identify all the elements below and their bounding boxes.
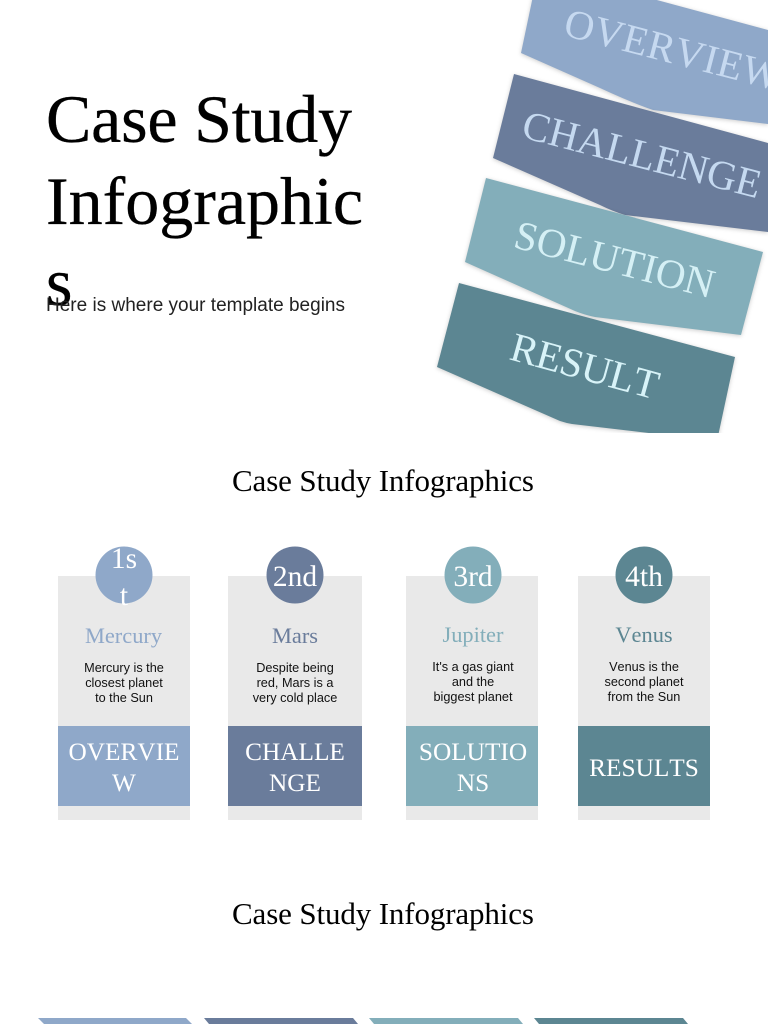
heading: section two: Case Study Infographics xyxy=(232,896,534,931)
card: Mercury: OVERVIE xyxy=(68,738,180,766)
title: Infographic xyxy=(46,163,363,239)
ribbon: result: RESULT xyxy=(506,323,664,408)
card: Jupiter: SOLUTIO xyxy=(419,738,527,766)
card: Mercury xyxy=(58,543,190,820)
card: Jupiter xyxy=(406,546,538,820)
card: Jupiter: Jupiter xyxy=(443,622,504,647)
card: Venus xyxy=(578,546,710,820)
card: Mars: very cold place xyxy=(253,691,337,705)
card: Mars: CHALLE xyxy=(245,738,345,766)
card: Jupiter: NS xyxy=(457,769,489,797)
card: Mars: 2nd xyxy=(273,561,317,593)
heading: section one: Case Study Infographics xyxy=(232,463,534,498)
card: Mercury: to the Sun xyxy=(95,691,153,705)
ribbon: solution: SOLUTION xyxy=(510,211,720,307)
card: Venus: from the Sun xyxy=(608,690,680,704)
title: Case Study xyxy=(46,81,352,157)
card: Venus: Venus is the xyxy=(609,660,679,674)
card: Mercury: Mercury is the xyxy=(84,661,164,675)
title xyxy=(46,81,363,320)
card: Mercury: W xyxy=(112,769,136,797)
card: Jupiter: 3rd xyxy=(453,561,493,593)
card: Mercury: 1s xyxy=(111,543,137,575)
card: Mars: Mars xyxy=(272,623,318,648)
title: s xyxy=(46,244,72,320)
bottom chevrons xyxy=(38,1018,688,1024)
ribbon stack xyxy=(437,0,768,441)
card: Venus: 4th xyxy=(625,561,663,593)
card: Mars: NGE xyxy=(269,769,321,797)
card: Venus: RESULTS xyxy=(589,754,699,782)
card: Mercury: closest planet xyxy=(85,676,163,690)
card: Mars xyxy=(228,546,362,820)
card: Venus: Venus xyxy=(615,622,673,647)
card: Mercury: Mercury xyxy=(85,623,163,648)
ribbon: solution xyxy=(465,178,763,335)
subtitle: Here is where your template begins xyxy=(46,295,345,316)
card: Venus: second planet xyxy=(604,675,684,689)
card: Jupiter: biggest planet xyxy=(433,690,513,704)
card: Mars: Despite being xyxy=(256,661,334,675)
ribbon: overview xyxy=(521,0,768,124)
ribbon: result xyxy=(437,283,735,441)
card: Mars: red, Mars is a xyxy=(257,676,334,690)
card: Mercury: t xyxy=(120,580,129,612)
card: Jupiter: and the xyxy=(452,675,494,689)
card: Jupiter: It's a gas giant xyxy=(432,660,514,674)
ribbon: challenge: CHALLENGE xyxy=(518,101,766,207)
ribbon: challenge xyxy=(493,74,768,232)
